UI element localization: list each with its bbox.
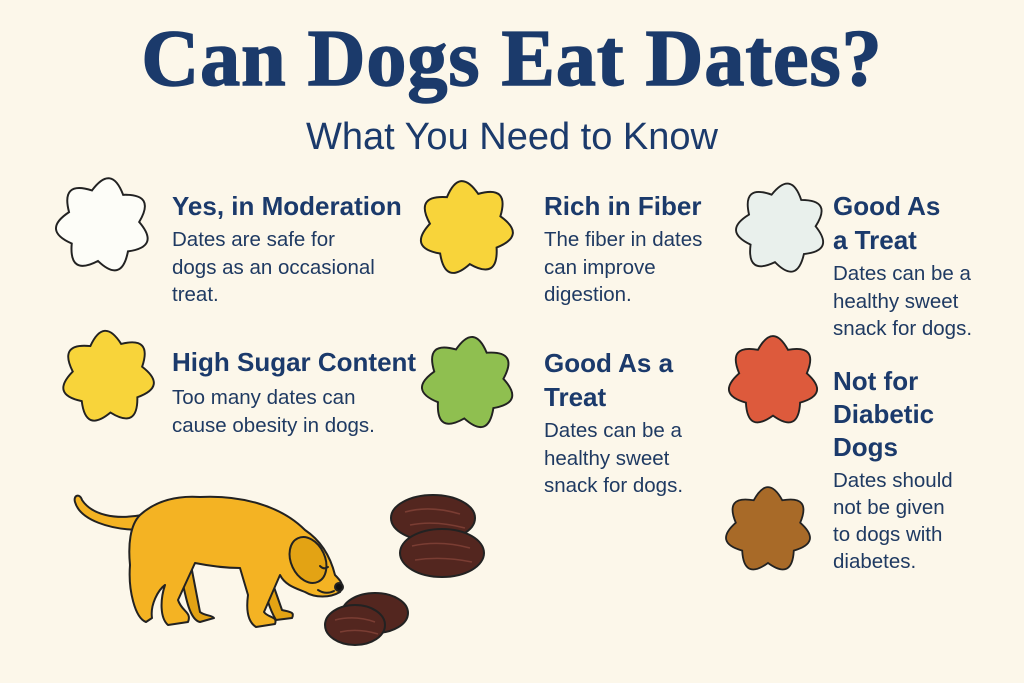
icon: white blob: [51, 172, 155, 274]
item: not for diabetic dogs: not be given: [833, 496, 945, 519]
item: yes in moderation: Dates are safe for: [172, 228, 335, 251]
icon: green blob: [418, 332, 518, 430]
tail: [75, 496, 142, 530]
item: yes in moderation: dogs as an occasional: [172, 256, 375, 278]
item: good as a treat: [544, 348, 683, 497]
item: not for diabetic dogs: diabetes.: [833, 550, 916, 573]
item: good as a treat: Treat: [544, 382, 606, 412]
item: high sugar: Too many dates can: [172, 386, 355, 409]
item: not for diabetic dogs: Diabetic: [833, 399, 934, 429]
icon: yellow blob 2: [60, 328, 156, 423]
icon: light blob: [730, 176, 832, 276]
body: [129, 497, 342, 627]
item: rich in fiber: The fiber in dates: [544, 228, 702, 251]
item: good as a treat 2: healthy sweet: [833, 290, 958, 312]
item: good as a treat: Good As a: [544, 348, 673, 378]
item: high sugar: [172, 347, 416, 436]
icon: red blob: [729, 336, 817, 422]
item: good as a treat 2: snack for dogs.: [833, 317, 972, 340]
item: good as a treat 2: Dates can be a: [833, 262, 971, 285]
item: good as a treat 2: a Treat: [833, 225, 917, 255]
item: yes in moderation: treat.: [172, 283, 219, 306]
dates: [325, 495, 484, 645]
item: rich in fiber: can improve: [544, 256, 656, 278]
item: not for diabetic dogs: [833, 366, 953, 573]
item: good as a treat 2: Good As: [833, 191, 940, 221]
item: good as a treat: Dates can be a: [544, 419, 682, 442]
icon: brown blob: [726, 487, 810, 569]
title: Can Dogs Eat Dates?: [141, 15, 883, 103]
item: not for diabetic dogs: Dogs: [833, 432, 898, 462]
item: yes in moderation: [172, 191, 402, 306]
far legs: [180, 560, 214, 622]
subtitle: What You Need to Know: [306, 116, 718, 158]
item: rich in fiber: digestion.: [544, 283, 632, 306]
item: not for diabetic dogs: to dogs with: [833, 523, 942, 546]
item: good as a treat 2: [833, 191, 972, 340]
item: good as a treat: healthy sweet: [544, 446, 669, 470]
item: not for diabetic dogs: Not for: [833, 366, 918, 396]
item: good as a treat: snack for dogs.: [544, 474, 683, 497]
item: yes in moderation: Yes, in Moderation: [172, 191, 402, 221]
icon: yellow blob 1: [415, 176, 516, 276]
item: rich in fiber: Rich in Fiber: [544, 191, 701, 221]
item: high sugar: cause obesity in dogs.: [172, 414, 375, 436]
item: high sugar: High Sugar Content: [172, 347, 416, 377]
ear: [282, 531, 334, 589]
item: not for diabetic dogs: Dates should: [833, 469, 953, 492]
item: rich in fiber: [544, 191, 702, 306]
